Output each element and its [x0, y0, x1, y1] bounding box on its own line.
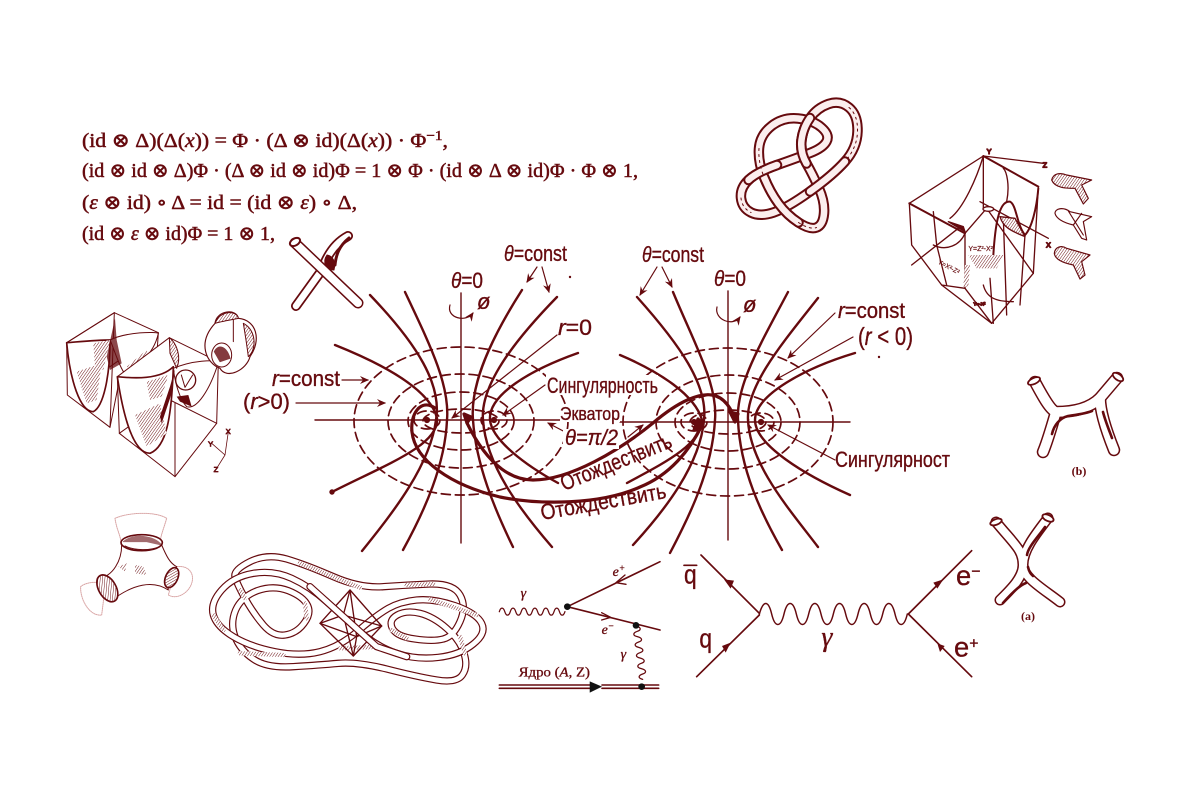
chart labels: (r < 0)	[858, 323, 913, 351]
left chart	[315, 290, 578, 551]
icon: 3D saddle box: Y=X²-Z²	[936, 259, 961, 276]
cube one	[67, 313, 158, 427]
icon: three-holed surface	[81, 513, 193, 615]
chart labels: r=const	[838, 298, 905, 323]
icon: tube junction (a): (a)	[1021, 609, 1035, 623]
diagram: small Feynman pair production: −	[608, 622, 614, 632]
diagram: large Feynman quark annihilation: +	[969, 635, 979, 652]
diagram: small Feynman pair production: γ	[621, 647, 627, 662]
icon: wireframe cubes with surfaces	[67, 312, 256, 477]
right chart	[620, 291, 855, 553]
axes XYZ: Y	[208, 440, 213, 449]
chart labels: θ=const	[642, 242, 704, 267]
chart labels: ø	[477, 289, 490, 314]
icon: 3D saddle box: Y=-X²	[973, 302, 986, 307]
equation line 3: (ε ⊗ id) ∘ Δ = id = (id ⊗ ε) ∘ Δ,	[82, 192, 357, 214]
diagram: small Feynman pair production: e	[602, 623, 608, 638]
diagram: large Feynman quark annihilation	[684, 551, 981, 677]
diagram: large Feynman quark annihilation: q	[699, 623, 712, 653]
equation line 4: (id ⊗ ε ⊗ id)Φ = 1 ⊗ 1,	[82, 223, 275, 245]
equation line 2: (id ⊗ id ⊗ Δ)Φ · (Δ ⊗ id ⊗ id)Φ = 1 ⊗ Φ · (id ⊗ Δ ⊗ id)Φ · Φ ⊗ 1,	[82, 160, 638, 182]
diagram: large Feynman quark annihilation: q	[684, 559, 697, 589]
diagram: large Feynman quark annihilation: e	[956, 560, 971, 591]
chart labels: Отождествить	[539, 478, 668, 525]
chart labels: θ=0	[451, 268, 483, 293]
chart labels	[243, 241, 950, 525]
icon: small fish-shaped surfaces	[1052, 174, 1092, 279]
equation line 1: −1	[426, 129, 443, 144]
chart labels: r=0	[558, 315, 592, 340]
equation line 1: (id ⊗ Δ)(Δ( x)) = Φ · (Δ ⊗ id)(Δ( x)) · Φ	[82, 130, 422, 152]
chart labels: θ=const	[504, 241, 567, 266]
diagram: large Feynman quark annihilation: γ	[821, 622, 833, 653]
icon: X-shaped tube top left	[288, 236, 358, 306]
chart labels: θ=π/2	[565, 425, 618, 450]
cube two	[117, 338, 219, 477]
diagram: small Feynman pair production: e	[613, 565, 619, 580]
chart labels: Сингулярность	[547, 373, 658, 398]
icon: tube junction (b): (b)	[1072, 464, 1086, 478]
chart labels: θ=0	[714, 266, 746, 291]
diagram: large Feynman quark annihilation: e	[954, 632, 969, 663]
diagram: small Feynman pair production	[499, 562, 660, 692]
diagram: coordinate charts of Kerr wormhole	[243, 241, 950, 553]
chart labels: Отождествить	[557, 428, 675, 496]
chart labels: Экватор	[560, 404, 620, 424]
diagram: large Feynman quark annihilation: −	[971, 564, 981, 581]
equations block	[82, 129, 638, 245]
axes XYZ	[208, 427, 231, 474]
thick identification curves	[412, 395, 738, 502]
icon: tube junction (b)	[1027, 371, 1125, 478]
equation line 1: ,	[443, 130, 448, 152]
octahedron	[320, 590, 382, 656]
diagram: small Feynman pair production: γ	[521, 586, 527, 601]
icon: 3D saddle box: Y=Z²-X²	[968, 246, 994, 253]
chart labels: ø	[743, 292, 756, 317]
icon: 3D saddle box: Y	[987, 147, 992, 156]
torus	[205, 312, 256, 373]
axes XYZ: Z	[214, 465, 219, 474]
chart labels: r=const	[272, 366, 340, 391]
icon: knot	[741, 103, 858, 228]
diagram: small Feynman pair production: +	[619, 564, 625, 574]
icon: 3D saddle box: Z	[1043, 160, 1048, 169]
icon: 3D saddle box	[909, 147, 1051, 323]
icon: twisted ribbon with octahedron	[213, 557, 483, 681]
label arrows	[296, 267, 853, 460]
chart labels: Сингулярност	[835, 447, 950, 472]
icon: tube junction (a)	[989, 513, 1060, 623]
icon: 3D saddle box: X	[1046, 240, 1051, 249]
diagram: small Feynman pair production: Ядро (A, Z)	[519, 666, 590, 681]
axes XYZ: X	[226, 427, 231, 436]
chart labels: (r>0)	[243, 389, 290, 414]
